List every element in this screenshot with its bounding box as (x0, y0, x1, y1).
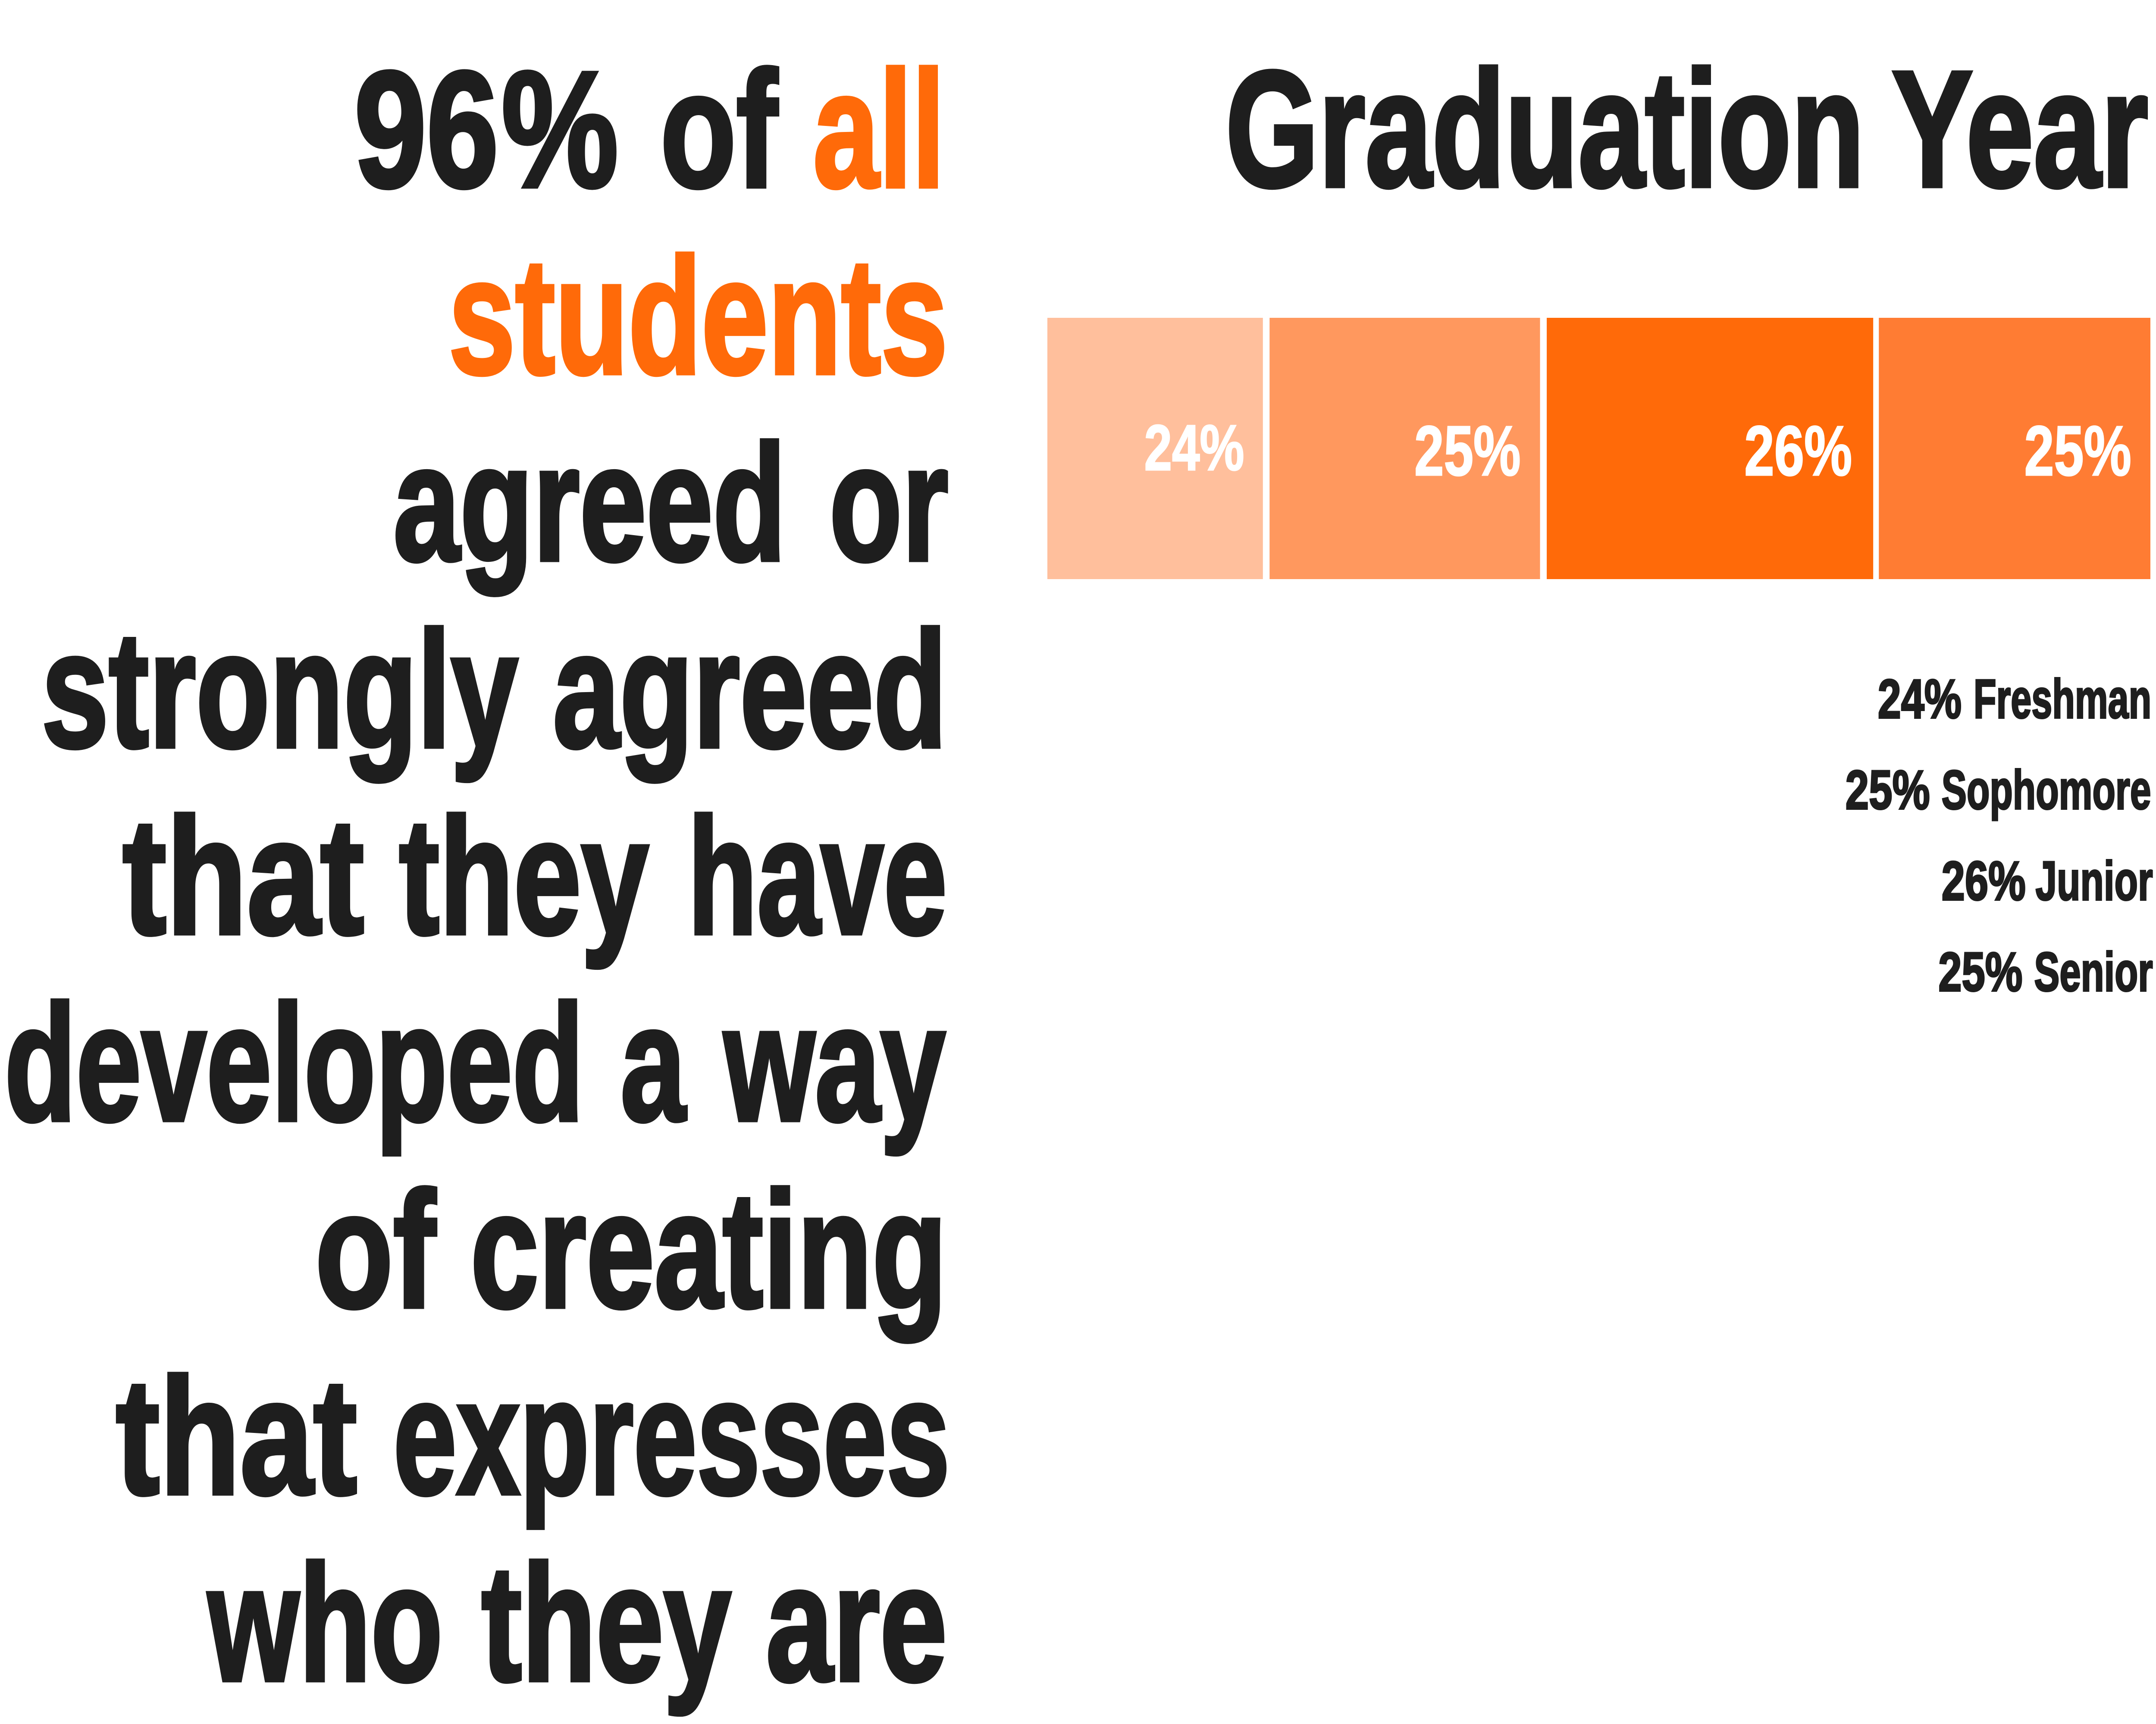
legend item: junior (1942, 850, 2153, 912)
headline line: developed a way: a (620, 971, 686, 1156)
headline line: that they have: they (399, 784, 649, 970)
headline line: 96% of all: % (501, 38, 618, 222)
legend item: junior: 26% (1942, 850, 2026, 912)
headline line: that they have: that (122, 784, 364, 969)
headline line: who they are: are (766, 1531, 947, 1716)
headline line: 96% of all (354, 38, 945, 222)
headline line: 96% of all: of (660, 38, 779, 222)
headline line: strongly agreed: strongly (41, 598, 519, 783)
headline line: that expresses (116, 1345, 950, 1530)
headline line: strongly agreed: agreed (553, 598, 947, 783)
headline line: who they are: they (481, 1531, 732, 1717)
chart title: Graduation (1225, 37, 1865, 222)
bar segment: junior 26%: 26% (1744, 411, 1852, 490)
legend item: senior (1938, 941, 2153, 1003)
bar segment: sophomore 25% (1269, 318, 1540, 579)
stacked bar chart (1047, 318, 2150, 579)
headline line: who they are: who (206, 1531, 443, 1716)
headline statement (5, 38, 950, 1717)
headline line: of creating: creating (470, 1158, 947, 1343)
bar segment: freshman 24%: 24% (1144, 412, 1244, 484)
headline line: strongly agreed (41, 598, 947, 783)
bar segment: freshman 24% (1047, 318, 1263, 579)
headline line: that expresses: expresses (393, 1345, 950, 1530)
headline line: that they have: have (688, 784, 947, 969)
headline line: 96% of all: all (813, 38, 945, 222)
headline line: developed a way: developed (5, 971, 584, 1157)
bar segment: senior 25% (1879, 318, 2150, 579)
legend item: sophomore (1846, 759, 2151, 821)
bar segment: sophomore 25%: 25% (1414, 411, 1521, 490)
headline line: who they are (206, 1531, 947, 1717)
legend item: senior: 25% (1938, 941, 2022, 1003)
bar segment: senior 25%: 25% (2024, 411, 2131, 490)
bar segment: junior 26% (1547, 318, 1873, 579)
headline line: that they have (122, 784, 947, 970)
headline line: agreed or: agreed (393, 411, 786, 596)
headline line: of creating (315, 1158, 947, 1343)
headline line: developed a way: way (722, 971, 946, 1157)
headline line: that expresses: that (116, 1345, 357, 1529)
legend item: freshman: 24% (1878, 668, 1962, 730)
headline line: agreed or: or (829, 411, 948, 596)
headline line: 96% of all: 96 (354, 38, 498, 222)
headline line: students: students (449, 224, 948, 409)
legend (1846, 668, 2153, 1003)
legend item: sophomore: 25% (1846, 759, 1930, 821)
headline line: of creating: of (315, 1158, 437, 1342)
legend item: freshman (1878, 668, 2151, 730)
